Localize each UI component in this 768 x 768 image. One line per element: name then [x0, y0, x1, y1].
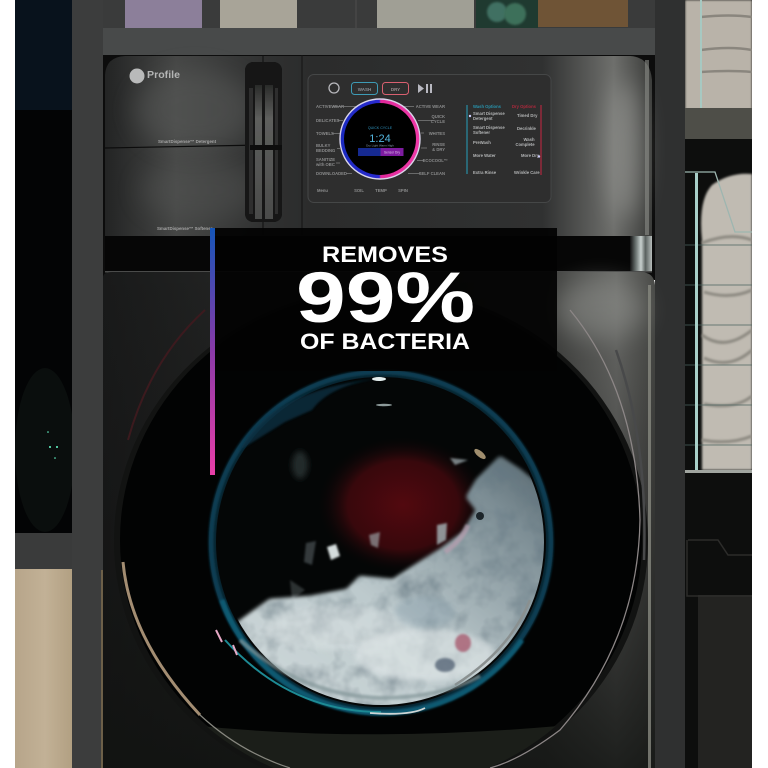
dial display: Sensor Dry: [384, 150, 400, 154]
cycle labels: RINSE: [432, 142, 445, 147]
dispenser handle: [245, 62, 282, 222]
cycle labels: BULKY: [316, 143, 331, 148]
cycle labels: TEMP: [375, 188, 387, 193]
wash options: Smart Dispense: [473, 125, 505, 130]
wash options: More Water: [473, 153, 496, 158]
cycle labels: Menu: [317, 188, 328, 193]
cycle labels: WHITES: [429, 131, 445, 136]
dial display: QUICK CYCLE: [368, 126, 393, 130]
dispenser labels: [157, 139, 217, 231]
cycle labels: [315, 104, 448, 193]
washer upper console: [105, 55, 652, 238]
caption: 99%: 99%: [296, 259, 475, 338]
cycle labels: & DRY: [432, 147, 445, 152]
washer lower body: [103, 272, 655, 768]
dry options: Wrinkle Care: [514, 170, 540, 175]
wash options: [467, 104, 505, 175]
foam: [237, 454, 544, 705]
wash options: Wash Options: [473, 104, 502, 109]
cycle labels: SANITIZE: [316, 157, 335, 162]
power and cycle buttons: WASH: [358, 87, 371, 92]
control panel: [308, 74, 551, 202]
top shelf with storage jars: [103, 0, 655, 280]
cycle labels: CYCLE: [431, 119, 445, 124]
gradient accent bar: [210, 228, 215, 475]
red garment: [328, 445, 474, 564]
cycle labels: QUICK: [432, 114, 445, 119]
water splashes: [290, 458, 468, 600]
wash options: Softener: [473, 130, 490, 135]
laundry bin: [687, 540, 752, 768]
cycle labels: DOWNLOADED: [316, 171, 347, 176]
dry options: Dry Options: [512, 104, 537, 109]
cycle labels: ACTIVEWEAR: [316, 104, 344, 109]
cycle labels: DELICATES: [316, 118, 340, 123]
glass lower rim: [216, 600, 530, 714]
wash drum window: [209, 370, 570, 730]
cycle labels: ECOCOOL™: [423, 158, 448, 163]
cycle labels: SPIN: [398, 188, 408, 193]
caption: removes: REMOVES: [322, 242, 448, 267]
wire basket with towels: [684, 172, 752, 473]
wash options: Smart Dispense: [473, 111, 505, 116]
cycle labels: SELF CLEAN: [419, 171, 445, 176]
right post and towel shelves: [655, 0, 752, 768]
power and cycle buttons: DRY: [391, 87, 400, 92]
caption: of bacteria: OF BACTERIA: [300, 329, 470, 354]
cycle labels: with OBC: [315, 162, 335, 167]
cycle labels: BEDDING: [316, 148, 335, 153]
door rim reflections: [123, 310, 644, 768]
left shelving unit: [15, 0, 108, 768]
power and cycle buttons: [329, 82, 432, 94]
cycle labels: TOWELS: [316, 131, 334, 136]
dispenser labels: SmartDispense™ Softener: [157, 226, 213, 231]
cycle connector lines: [332, 106, 434, 174]
dry options: More Dry: [521, 153, 540, 158]
caption panel: [210, 228, 557, 475]
drum light highlights: [292, 377, 487, 479]
washer door: [114, 288, 648, 768]
wash options: Extra Rinse: [473, 170, 497, 175]
cycle labels: ACTIVE WEAR: [416, 104, 445, 109]
wash options: PreWash: [473, 140, 491, 145]
dispenser labels: SmartDispense™ Detergent: [158, 139, 217, 144]
dial display: Dry Light Warm High: [366, 144, 394, 148]
dry options: Complete: [515, 142, 535, 147]
wash options: Detergent: [473, 116, 493, 121]
black band and chrome trim: [105, 236, 652, 272]
dry options: Decrinkle: [517, 126, 537, 131]
dial display: 1:24: [369, 133, 391, 145]
dry options: Wash: [523, 137, 535, 142]
door lower shadow: [208, 726, 555, 768]
dry options: [512, 104, 541, 175]
upper towels: [684, 0, 752, 139]
dial display: [340, 99, 420, 179]
dry options: Timed Dry: [517, 113, 538, 118]
GE Profile logo: [130, 68, 180, 84]
GE Profile logo: Profile: [147, 69, 180, 81]
cycle labels: SOIL: [354, 188, 364, 193]
